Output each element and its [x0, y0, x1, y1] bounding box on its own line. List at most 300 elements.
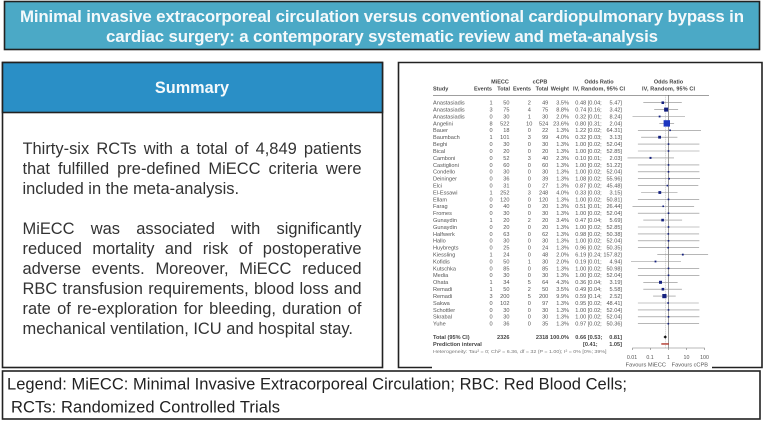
forest plot axis: 10: [684, 355, 689, 361]
study: Remadi 2: 5: [528, 294, 531, 300]
heterogeneity note: Heterogeneity: Tau² = 0; Chi² = 6.36, df = 32 (P = 1.00); I² = 0% [0%; 39%]: [433, 349, 607, 355]
study: Skrabal: 30: [503, 315, 510, 321]
study: Bauer: 0: [489, 128, 493, 134]
study: Ohata: 0.36 [0.04;: [575, 280, 602, 286]
study: Camboni: 2.03]: [610, 156, 622, 162]
text block: included trials: Thirty-six RCTs with a total of 4,849 patients: [22, 140, 362, 158]
study: Huybregts: [433, 246, 699, 252]
study: Gunaydin 2: [433, 225, 700, 231]
study: Ohata: 1: [489, 280, 493, 286]
study: Elci: 31: [503, 184, 510, 190]
prediction interval row: Prediction interval: [433, 342, 482, 348]
forest plot table header: cCPB: [533, 80, 547, 86]
forest plot table header: MiECC: [491, 80, 509, 86]
forest plot table header: IV, Random, 95% CI: [642, 87, 695, 93]
study: Beghi: 1.3%: [556, 142, 569, 148]
study: Anastasiadis 2: 3: [489, 108, 493, 114]
study: Baumbach: 3.13]: [610, 135, 622, 141]
study: Camboni: 3: [528, 156, 531, 162]
study: Fromes: [433, 211, 699, 217]
text block: included trials: [22, 139, 362, 199]
study: Elci: 45.48]: [606, 184, 622, 190]
study: Bical: Bical: [433, 149, 445, 155]
study: Skrabal: 0: [489, 315, 493, 321]
study: Yuhe: 36: [503, 322, 510, 328]
study: Ellam: 1.00 [0.02;: [575, 197, 602, 203]
forest plot axis: [626, 348, 709, 368]
study: Sakwa: 0.95 [0.02;: [575, 301, 602, 307]
study: Deininger: 1.3%: [556, 177, 569, 183]
study: Hallo: 0: [528, 239, 531, 245]
text block: included trials: included in the meta-analysis.: [22, 180, 239, 198]
forest plot axis: Favours cCPB: [672, 362, 708, 368]
forest plot table header: [433, 80, 695, 93]
study: Ellam: 50.81]: [606, 197, 622, 203]
study: Ellam: [433, 197, 699, 203]
study: Bical: 0: [528, 149, 531, 155]
study: Ellam: Ellam: [433, 197, 447, 203]
study: Halfwerk: 62: [542, 232, 548, 238]
study: Yuhe: 0: [489, 322, 493, 328]
study: Anastasiadis 2: 8.8%: [556, 108, 569, 114]
study: Beghi: 52.04]: [606, 142, 622, 148]
study: Beghi: 30: [503, 142, 510, 148]
study: Anastasiadis 1: Anastasiadis: [433, 101, 465, 107]
study: El-Essawi: 4.0%: [556, 190, 569, 196]
study: Remadi 1: 1: [489, 287, 493, 293]
study: Ellam: 0: [528, 197, 531, 203]
forest plot axis: Favours MiECC: [626, 362, 666, 368]
study: Castiglioni: 1.3%: [556, 163, 569, 169]
study: Huybregts: 24: [542, 246, 548, 252]
study: Condello: 0: [489, 170, 493, 176]
study: Anastasiadis 1: 49: [542, 101, 548, 107]
study: Remadi 1: 2: [528, 287, 531, 293]
study: Baumbach: 0.32 [0.03;: [575, 135, 602, 141]
study: Sakwa: Sakwa: [433, 301, 451, 307]
study: Deininger: [433, 177, 700, 183]
study: Condello: 30: [503, 170, 510, 176]
study: Deininger: 55.96]: [606, 177, 622, 183]
study: Angelini: 0.80 [0.31;: [575, 121, 602, 127]
study: Kutschka: 85: [542, 266, 548, 272]
study: Fromes: 52.04]: [606, 211, 622, 217]
study: Remadi 2: Remadi: [433, 294, 452, 300]
study: Schottler: 0: [489, 308, 493, 314]
study: Ohata: [433, 280, 678, 286]
study: Schottler: 30: [503, 308, 510, 314]
study: Hallo: 30: [542, 239, 548, 245]
study: Bical: 1.00 [0.02;: [575, 149, 602, 155]
study: Schottler: 0: [528, 308, 531, 314]
study: Angelini: 10: [526, 121, 532, 127]
study: El-Essawi: 3.15]: [610, 190, 622, 196]
study: Media: 0: [528, 273, 531, 279]
study: Gunaydin 1: 1: [489, 218, 493, 224]
forest plot table header: Events: [474, 87, 492, 93]
study: Anastasiadis 3: 8.24]: [610, 114, 622, 120]
study: Halfwerk: 50.38]: [606, 232, 622, 238]
study: Kofidis: 0: [489, 259, 493, 265]
study: Gunaydin 1: 3.4%: [556, 218, 569, 224]
text block: main findings: adverse events. Moreover, MiECC reduced: [22, 260, 362, 278]
study: Bauer: 0: [528, 128, 531, 134]
study: Media: 52.04]: [606, 273, 622, 279]
study: Deininger: Deininger: [433, 177, 457, 183]
study: Angelini: 522: [500, 121, 510, 127]
study: Baumbach: [433, 135, 677, 141]
forest plot table header: Odds Ratio: [654, 80, 684, 86]
study: Condello: [433, 170, 699, 176]
study: Farag: [433, 204, 694, 210]
study: Huybregts: 0: [528, 246, 531, 252]
study: Farag: 40: [503, 204, 510, 210]
study: Anastasiadis 1: 2: [528, 101, 531, 107]
study: El-Essawi: 3: [528, 190, 531, 196]
study: Castiglioni: 51.22]: [606, 163, 622, 169]
study: Kiessling: 1: [489, 252, 493, 258]
title banner: [4, 2, 760, 50]
study: Hallo: Hallo: [433, 239, 446, 245]
study: Bauer: 1.3%: [556, 128, 569, 134]
study: Farag: Farag: [433, 204, 448, 210]
study: Yuhe: 0.97 [0.02;: [575, 322, 602, 328]
forest plot table header: Study: [433, 87, 449, 93]
study: Gunaydin 2: Gunaydin: [433, 225, 457, 231]
study: Deininger: 36: [503, 177, 510, 183]
study: Angelini: 8: [489, 121, 493, 127]
study: Remadi 1: 3.5%: [556, 287, 569, 293]
study: Beghi: 0: [489, 142, 493, 148]
study: Camboni: 2.3%: [556, 156, 569, 162]
study: Gunaydin 2: 20: [503, 225, 510, 231]
study: Kofidis: [433, 259, 681, 265]
study: Beghi: [433, 142, 699, 148]
forest plot axis: 0.01: [627, 355, 637, 361]
study: Sakwa: 102: [500, 301, 510, 307]
study: Bauer: 22: [542, 128, 548, 134]
study: Huybregts: Huybregts: [433, 246, 459, 252]
study: Halfwerk: 0.98 [0.02;: [575, 232, 602, 238]
study: Gunaydin 1: 5.69]: [610, 218, 622, 224]
study: Kutschka: 0: [489, 266, 493, 272]
study: Angelini: [433, 120, 674, 127]
forest plot table header: Events: [513, 87, 531, 93]
study: Anastasiadis 3: Anastasiadis: [433, 114, 465, 120]
study: Bauer: Bauer: [433, 128, 448, 134]
study: Kutschka: Kutschka: [433, 266, 457, 272]
study: Hallo: 0: [489, 239, 493, 245]
study: Deininger: 39: [542, 177, 548, 183]
study: Halfwerk: 1.3%: [556, 232, 569, 238]
study: El-Essawi: 252: [500, 190, 510, 196]
study: Halfwerk: 63: [503, 232, 510, 238]
forest plot table header: Total: [536, 87, 549, 93]
study: Anastasiadis 1: 5.47]: [610, 101, 622, 107]
study: Halfwerk: Halfwerk: [433, 232, 455, 238]
text block: main findings: [22, 219, 362, 339]
pooled total row: 2326: [497, 335, 510, 341]
forest plot table header: Weight: [551, 87, 569, 93]
study: Sakwa: [433, 301, 699, 307]
study: Bical: [433, 149, 700, 155]
study: Remadi 2: [433, 294, 676, 300]
forest plot table header: IV, Random, 95% CI: [573, 87, 625, 93]
study: Huybregts: 0: [489, 246, 493, 252]
study: Kofidis: Kofidis: [433, 259, 450, 265]
forest plot reference lines: [665, 95, 668, 348]
study: Halfwerk: 0: [528, 232, 531, 238]
pooled total row: Total (95% CI): [433, 335, 470, 341]
study: Angelini: 2.04]: [610, 121, 622, 127]
study: Elci: 0: [528, 184, 531, 190]
study: Skrabal: 0: [528, 315, 531, 321]
study: Fromes: 0: [528, 211, 531, 217]
study: Castiglioni: Castiglioni: [433, 163, 459, 169]
study: Condello: 30: [542, 170, 548, 176]
study: Yuhe: [433, 322, 699, 328]
study: Kutschka: [433, 266, 699, 272]
study: Kiessling: 24: [503, 252, 510, 258]
study: Farag: 0.51 [0.01;: [575, 204, 602, 210]
forest plot table header: Total: [497, 87, 510, 93]
study: Gunaydin 2: 1.3%: [556, 225, 569, 231]
study: Remadi 1: [433, 287, 682, 293]
text block: main findings: reduced mortality and risk of postoperative: [22, 240, 362, 258]
study: Media: 30: [542, 273, 548, 279]
study: Remadi 1: 0.49 [0.04;: [575, 287, 602, 293]
study: Camboni: 0.10 [0.01;: [575, 156, 602, 162]
study: Fromes: 1.00 [0.02;: [575, 211, 602, 217]
study: Castiglioni: 1.00 [0.02;: [575, 163, 602, 169]
study: Huybregts: 25: [503, 246, 510, 252]
study: Anastasiadis 2: 3.42]: [610, 108, 622, 114]
study: Kiessling: 48: [542, 252, 548, 258]
study: Yuhe: Yuhe: [433, 322, 446, 328]
study: Skrabal: 1.3%: [556, 315, 569, 321]
prediction interval row: 1.05]: [609, 342, 622, 348]
study: Sakwa: 97: [542, 301, 548, 307]
study: Camboni: 0: [489, 156, 493, 162]
panel: forest plot: [398, 62, 762, 368]
study: Anastasiadis 2: Anastasiadis: [433, 108, 465, 114]
study: Kofidis: 30: [542, 259, 548, 265]
summary heading: [2, 62, 382, 112]
study: Sakwa: 1.3%: [556, 301, 569, 307]
forest plot axis: 0.1: [646, 355, 654, 361]
study: Ohata: 4.3%: [556, 280, 569, 286]
study: Bauer: 1.22 [0.02;: [575, 128, 602, 134]
legend: [2, 371, 760, 419]
study: Schottler: Schottler: [433, 308, 455, 314]
title banner: Minimal invasive extracorporeal circulation versus conventional cardiopulmonary bypass in: [20, 7, 744, 26]
forest plot table header: Odds Ratio: [584, 80, 614, 86]
study: Remadi 2: 9.9%: [556, 294, 569, 300]
study: Kofidis: 1: [528, 259, 531, 265]
study: Ohata: 34: [503, 280, 510, 286]
study: El-Essawi: 1: [489, 190, 493, 196]
study: Ellam: 120: [539, 197, 548, 203]
study: Remadi 2: 2.52]: [610, 294, 622, 300]
text block: main findings: RBC transfusion requirements, blood loss and: [22, 280, 362, 298]
study: Media: 1.3%: [556, 273, 569, 279]
study: Huybregts: 50.35]: [606, 246, 622, 252]
study: Bical: 0: [489, 149, 493, 155]
pooled total row: 0.81]: [609, 335, 622, 341]
study: Elci: 0.87 [0.02;: [575, 184, 602, 190]
study: Condello: 1.00 [0.02;: [575, 170, 602, 176]
text block: included trials: that fulfilled pre-defined MiECC criteria were: [22, 160, 362, 178]
study: Gunaydin 1: 2: [528, 218, 531, 224]
study: Schottler: 1.00 [0.02;: [575, 308, 602, 314]
study: Fromes: 30: [542, 211, 548, 217]
study: Farag: 26.44]: [606, 204, 622, 210]
study: Gunaydin 1: 20: [542, 218, 548, 224]
study: Castiglioni: 0: [528, 163, 531, 169]
study: Beghi: 0: [528, 142, 531, 148]
study: Condello: 52.04]: [606, 170, 622, 176]
study: Castiglioni: 60: [542, 163, 548, 169]
text block: main findings: mechanical ventilation, ICU and hospital stay.: [22, 320, 353, 338]
study: Remadi 1: 50: [503, 287, 510, 293]
study: Remadi 1: 50: [542, 287, 548, 293]
study: Castiglioni: 60: [503, 163, 510, 169]
study: Camboni: 52: [503, 156, 510, 162]
legend: Legend: MiECC: Minimal Invasive Extracorporeal Circulation; RBC: Red Blood Cells;: [7, 375, 627, 393]
pooled total row: [433, 335, 667, 341]
study: Media: [433, 273, 699, 279]
study: Anastasiadis 2: 4: [528, 108, 531, 114]
study: Condello: Condello: [433, 170, 455, 176]
study: Kiessling: 157.82]: [603, 252, 622, 258]
study: Hallo: [433, 239, 699, 245]
study: Ellam: 0: [489, 197, 493, 203]
study: Remadi 2: 200: [539, 294, 548, 300]
study: Schottler: [433, 308, 699, 314]
study: Gunaydin 1: Gunaydin: [433, 218, 457, 224]
study: Gunaydin 2: 0: [489, 225, 493, 231]
study: Baumbach: 1: [489, 135, 493, 141]
study: Angelini: 23.6%: [553, 121, 569, 127]
study: Anastasiadis 3: 0: [489, 114, 493, 120]
study: Kutschka: 1.00 [0.02;: [575, 266, 602, 272]
text block: main findings: rate of re-exploration for bleeding, duration of: [22, 300, 362, 318]
study: Anastasiadis 1: 3.5%: [556, 101, 569, 107]
study: Schottler: 1.3%: [556, 308, 569, 314]
study: Fromes: 30: [503, 211, 510, 217]
study: Remadi 2: 200: [500, 294, 510, 300]
study: Ohata: 5: [528, 280, 531, 286]
study: Anastasiadis 1: 0.48 [0.04;: [575, 101, 602, 107]
study: Kofidis: 0.19 [0.01;: [575, 259, 602, 265]
study: Anastasiadis 3: 30: [542, 114, 548, 120]
study: Yuhe: 1.3%: [556, 322, 569, 328]
forest plot axis: 100: [700, 355, 709, 361]
study: Fromes: 0: [489, 211, 493, 217]
study: Elci: Elci: [433, 184, 442, 190]
study: Deininger: 0: [489, 177, 493, 183]
study: Beghi: 30: [542, 142, 548, 148]
study: Farag: 20: [542, 204, 548, 210]
study: Anastasiadis 3: 2.0%: [556, 114, 569, 120]
study: Yuhe: 50.36]: [606, 322, 622, 328]
study: Sakwa: 0: [528, 301, 531, 307]
study: Beghi: Beghi: [433, 142, 447, 148]
study: Sakwa: 48.41]: [606, 301, 622, 307]
study: Gunaydin 1: 20: [503, 218, 510, 224]
study: Hallo: 1.3%: [556, 239, 569, 245]
study: Kutschka: 50.98]: [606, 266, 622, 272]
study: Beghi: 1.00 [0.02;: [575, 142, 602, 148]
study: Ellam: 1.3%: [556, 197, 569, 203]
study: El-Essawi: [433, 190, 678, 196]
pooled total row: 100.0%: [550, 335, 569, 341]
study: Ohata: 64: [542, 280, 548, 286]
study: Bical: 20: [542, 149, 548, 155]
study: Anastasiadis 1: [433, 101, 682, 107]
study: Ohata: 3.19]: [610, 280, 622, 286]
study: Remadi 2: 3: [489, 294, 493, 300]
study: Ellam: 120: [500, 197, 510, 203]
study: Kutschka: 85: [503, 266, 510, 272]
forest plot axis: 1: [667, 355, 670, 361]
study: Media: 0: [489, 273, 493, 279]
study: Kiessling: 2.0%: [556, 252, 569, 258]
study: Fromes: Fromes: [433, 211, 452, 217]
study: Elci: 0: [489, 184, 493, 190]
study: Anastasiadis 3: 30: [503, 114, 510, 120]
legend: RCTs: Randomized Controlled Trials: [11, 399, 280, 417]
study: El-Essawi: 0.33 [0.03;: [575, 190, 602, 196]
study: Anastasiadis 2: 75: [503, 108, 510, 114]
study: Bical: 20: [503, 149, 510, 155]
study: Skrabal: [433, 315, 699, 321]
study: Kiessling: [433, 252, 708, 258]
study: Gunaydin 1: [433, 218, 682, 224]
study: Huybregts: 0.96 [0.02;: [575, 246, 602, 252]
study: Fromes: 1.3%: [556, 211, 569, 217]
study: Kofidis: 4.94]: [610, 259, 622, 265]
study: Gunaydin 2: 1.00 [0.02;: [575, 225, 602, 231]
study: Hallo: 52.04]: [606, 239, 622, 245]
prediction interval row: [0.41;: [583, 342, 598, 348]
study: Farag: 1.3%: [556, 204, 569, 210]
study: Ohata: Ohata: [433, 280, 449, 286]
study: Kofidis: 50: [503, 259, 510, 265]
study: Camboni: Camboni: [433, 156, 455, 162]
study: Skrabal: 52.04]: [606, 315, 622, 321]
study: Remadi 1: 5.58]: [610, 287, 622, 293]
study: Huybregts: 1.3%: [556, 246, 569, 252]
study: Deininger: 0: [528, 177, 531, 183]
text block: main findings: MiECC was associated with significantly: [22, 220, 362, 238]
forest plot content: [433, 80, 709, 368]
study: Anastasiadis 3: [433, 114, 685, 120]
study: Bauer: [433, 128, 701, 134]
study: Kutschka: 1.3%: [556, 266, 569, 272]
study: Schottler: 30: [542, 308, 548, 314]
study: Baumbach: 3: [528, 135, 531, 141]
panel: summary: [2, 62, 382, 368]
study: Media: Media: [433, 273, 449, 279]
study: Anastasiadis 3: 1: [528, 114, 531, 120]
study: Gunaydin 2: 20: [542, 225, 548, 231]
study: Anastasiadis 2: 0.74 [0.16;: [575, 108, 602, 114]
study: Hallo: 1.00 [0.02;: [575, 239, 602, 245]
study: Media: 1.00 [0.02;: [575, 273, 602, 279]
study: Baumbach: 99: [542, 135, 548, 141]
study: Gunaydin 2: 0: [528, 225, 531, 231]
